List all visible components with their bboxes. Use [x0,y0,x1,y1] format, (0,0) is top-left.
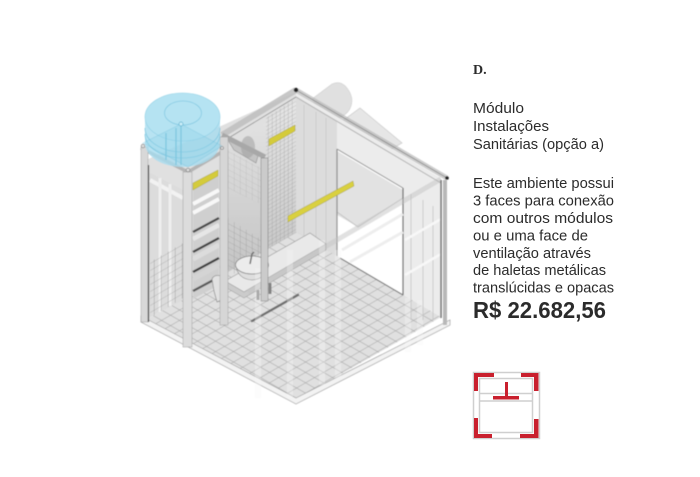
left bay panel [148,172,183,318]
water tank [143,93,222,167]
post caps [141,144,224,172]
module plan icon [474,372,540,438]
module title: Instalações [473,118,549,135]
right back wall [296,92,441,317]
door opening [337,149,403,296]
description: translúcidas e opacas [473,280,614,296]
top beam: right [296,90,447,183]
louvers [193,176,219,299]
toilet [212,275,226,302]
sink bench [225,233,326,300]
module title: Sanitárias (opção a) [473,136,604,153]
isometric module drawing [141,83,450,404]
section letter: D. [473,63,487,78]
description: ventilação através [473,245,591,262]
description: de haletas metálicas [473,262,606,279]
roof plate [318,108,402,172]
yellow bar: left [193,170,218,190]
left back wall [146,92,296,320]
yellow bar: upper [269,125,295,146]
module title [473,100,604,153]
wall tile grid: lower left [150,243,183,318]
description: ou e uma face de [473,227,588,244]
price: R$ 22.682,56 [473,297,606,323]
description: Este ambiente possui [473,175,614,192]
top beam: left [141,90,296,172]
shower head [226,136,262,178]
grab bar [252,295,298,321]
background cylinder [312,83,352,122]
base slab [141,316,450,404]
description: 3 faces para conexão [473,192,614,210]
module title: Módulo [473,100,524,117]
description: com outros módulos [473,210,613,227]
yellow bar: long [288,181,354,222]
translucent front frame [248,179,441,398]
description [473,175,614,296]
wall tile grid: shower [228,98,296,290]
sink basin [236,252,268,280]
floor tiles [146,232,441,400]
corner posts [141,88,449,347]
